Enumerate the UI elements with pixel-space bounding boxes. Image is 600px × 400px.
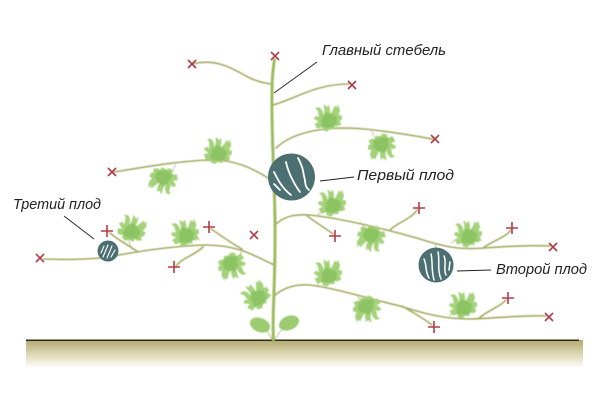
main stem [272, 60, 275, 341]
label: first fruit: Первый плод [357, 167, 454, 184]
plant [44, 60, 550, 341]
leaf stalks [128, 122, 458, 316]
cotyledon: right [275, 313, 301, 339]
label: third fruit: Третий плод [13, 196, 101, 213]
vine: upper right [273, 84, 349, 105]
vine: second right [276, 128, 433, 148]
fruit: second [418, 243, 454, 282]
vine: upper left [192, 62, 271, 84]
label: main stem [274, 42, 446, 93]
vine: lower left branches [110, 229, 242, 266]
vine: lower right one [276, 215, 550, 249]
vine end markers: crosses [36, 52, 557, 321]
vine: lower left [44, 245, 274, 265]
label: second fruit: Второй плод [496, 261, 587, 278]
vine: middle left [114, 160, 268, 178]
label: first fruit [320, 167, 454, 184]
vine: lower right one branches [306, 210, 511, 248]
vine end markers: pluses [101, 202, 518, 333]
fruit: first [268, 154, 315, 200]
label: second fruit [457, 261, 587, 278]
vine: lower right two [274, 285, 546, 319]
vine: lower right two branches [402, 300, 506, 325]
label: third fruit [13, 196, 101, 239]
label: main stem: Главный стебель [322, 42, 446, 59]
fruit: third [98, 240, 118, 262]
cotyledon: left [248, 315, 272, 339]
leaves [115, 101, 484, 326]
ground [26, 340, 583, 367]
